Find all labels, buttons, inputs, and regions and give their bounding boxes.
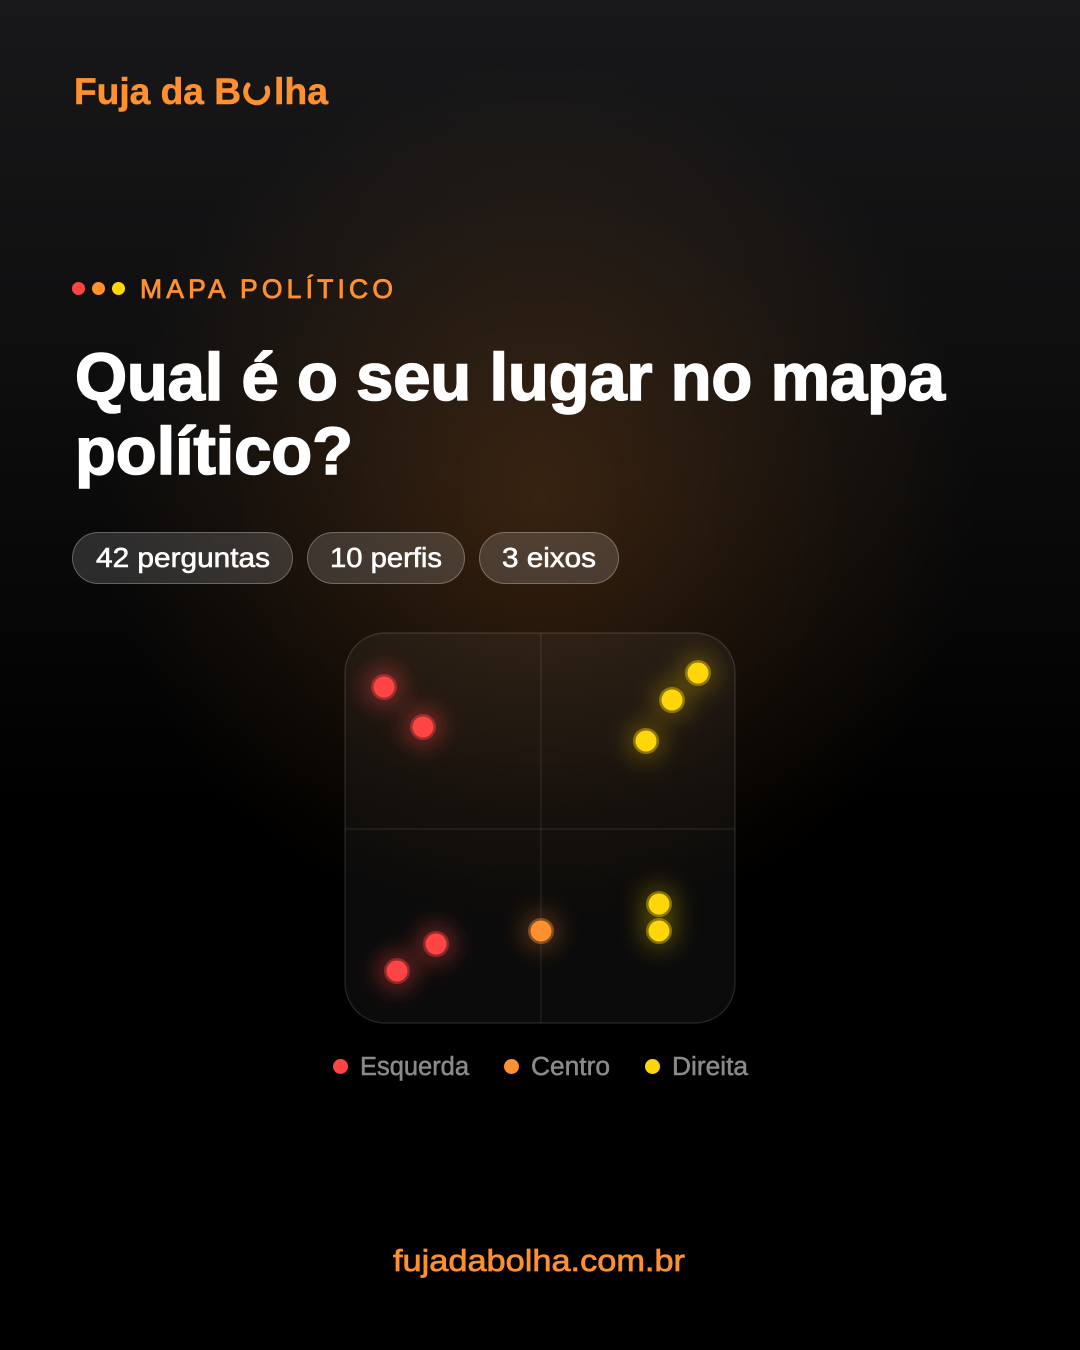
pill: 3 eixos	[480, 532, 618, 584]
pill: 10 perfis	[308, 532, 464, 584]
logo: Fuja da Bolha: Fuja da B	[74, 71, 241, 112]
logo: Fuja da Bolha	[74, 71, 328, 112]
pill: 42 perguntas: 42 perguntas	[96, 542, 270, 573]
legend	[333, 1053, 749, 1081]
chart: political quadrant map	[345, 633, 735, 1023]
pill: 3 eixos: 3 eixos	[502, 542, 596, 573]
logo: Fuja da Bolha: lha	[274, 71, 328, 112]
dot: centre	[520, 910, 562, 952]
pill: 42 perguntas	[72, 532, 292, 584]
dots: right	[625, 652, 719, 952]
icon: logo open circle	[246, 85, 268, 103]
legend item: Centro: Centro	[531, 1053, 610, 1081]
legend item: Direita: Direita	[672, 1053, 749, 1081]
title: político?	[75, 414, 353, 489]
eyebrow: dots and label: MAPA POLÍTICO	[140, 274, 393, 304]
legend item: Esquerda: Esquerda	[360, 1053, 470, 1081]
dots: left	[363, 666, 457, 992]
pill: 10 perfis: 10 perfis	[330, 542, 442, 573]
title	[75, 340, 946, 489]
footer url: fujadabolha.com.br	[393, 1243, 685, 1278]
title: Qual é o seu lugar no mapa	[75, 340, 946, 415]
